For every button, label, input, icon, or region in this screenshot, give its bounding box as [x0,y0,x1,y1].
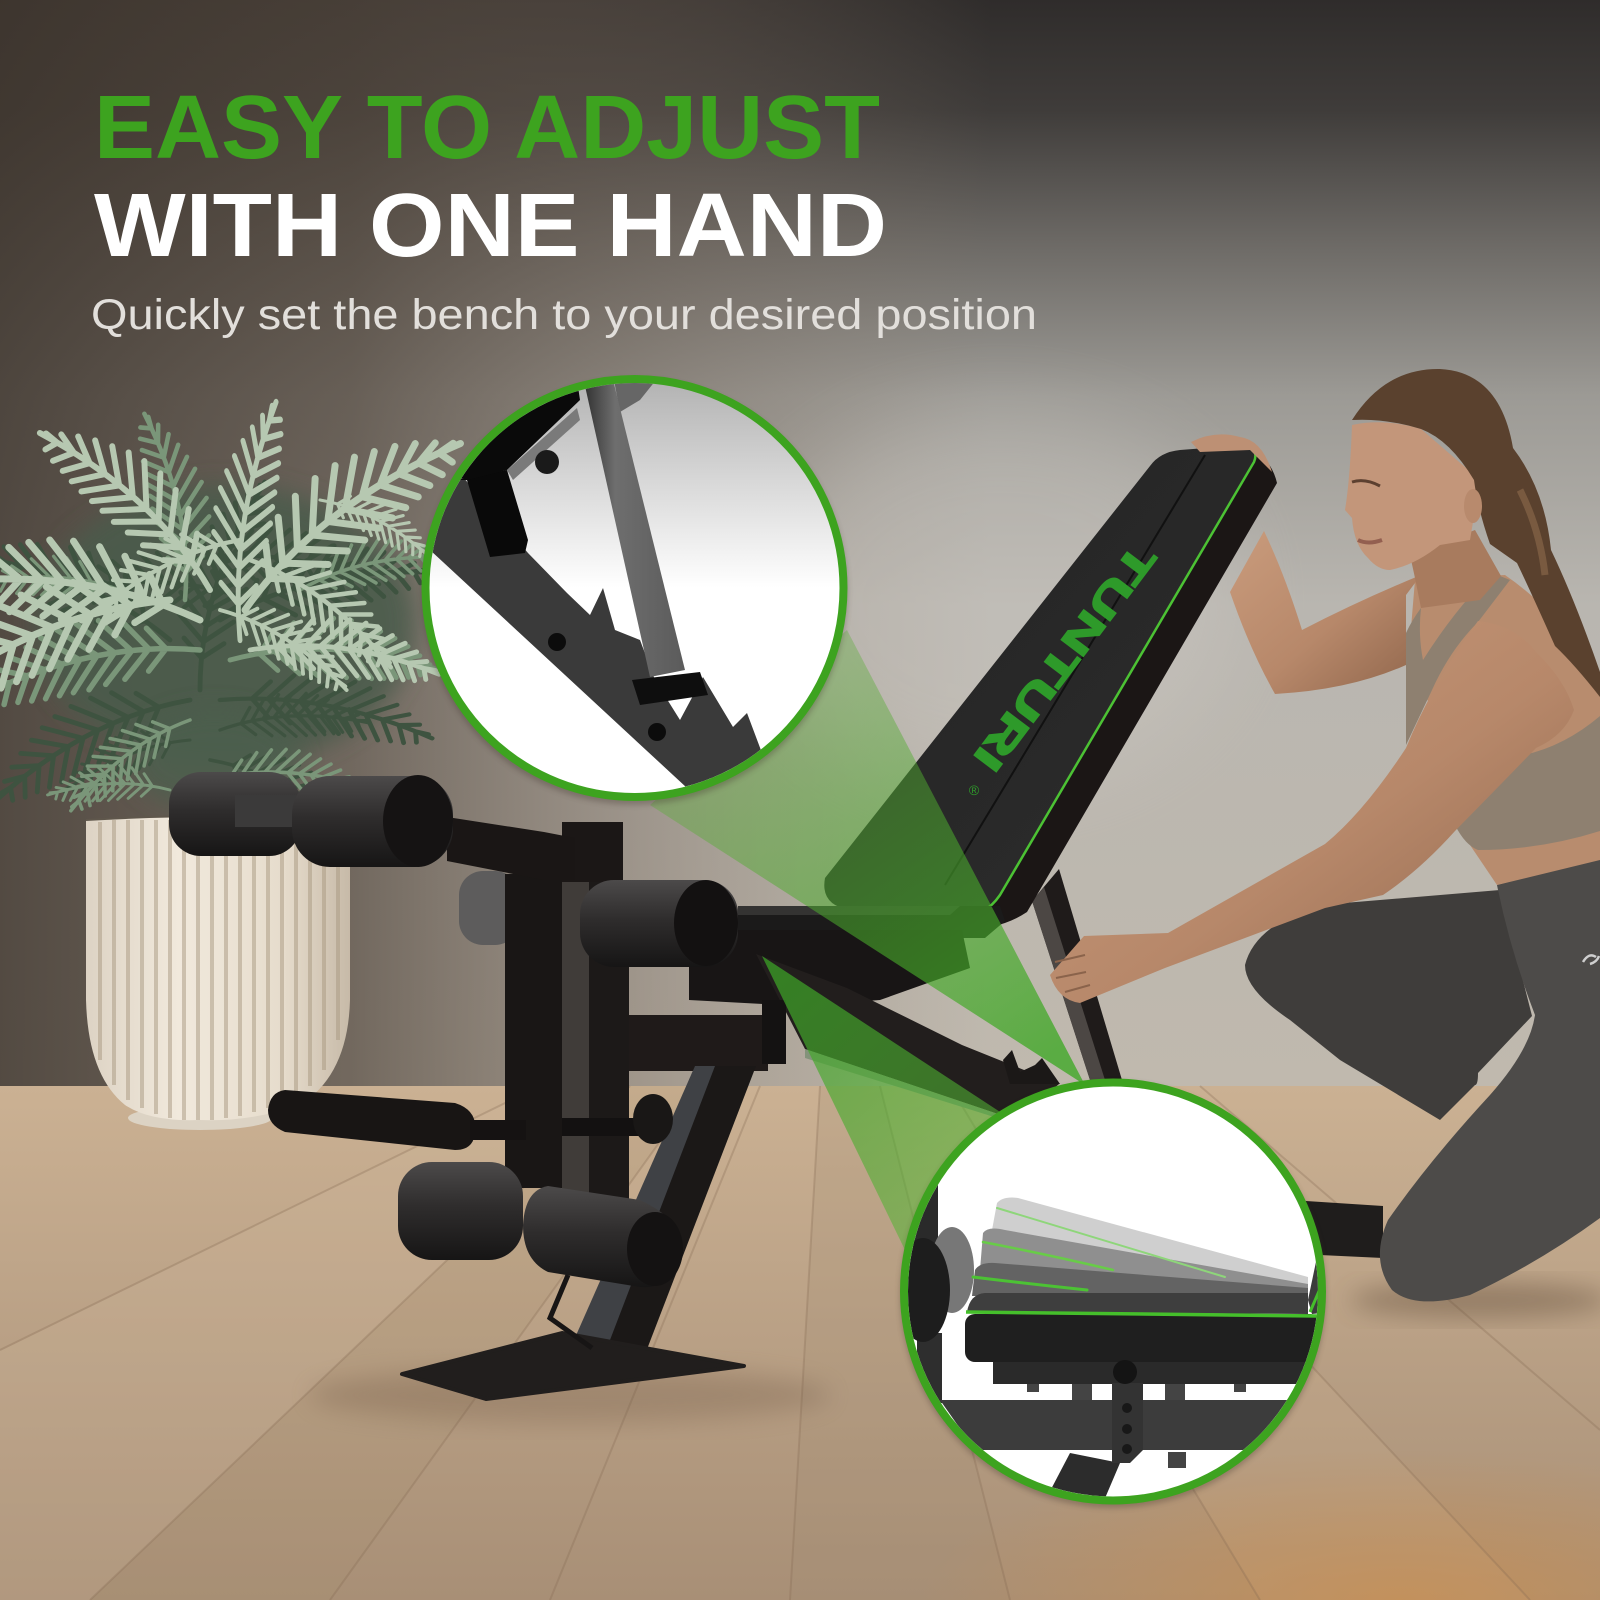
lower roller back [398,1162,523,1260]
hand grip bar [268,1090,526,1150]
bench seat and frame [169,772,1060,1399]
pin assembly [632,672,708,705]
fingers [1055,955,1090,992]
seat pad [965,1314,1320,1362]
post lower [917,1333,942,1403]
rail bolts [548,633,666,741]
post upper [913,1183,938,1247]
woman kneeling [1050,369,1600,1301]
seat [736,906,1005,938]
top-left black bar [462,391,580,478]
grey strut [585,380,685,677]
height-adjust bracket [762,1000,786,1064]
leggings logo mark [1583,955,1599,964]
face [1345,422,1480,570]
ghost pad 2 [980,1228,1308,1288]
lower arm reaching to post [1050,621,1574,1003]
adjust ball [1113,1360,1137,1384]
plant pot [86,816,350,1130]
bench support post [1032,869,1122,1080]
top bracket [562,822,623,882]
hook handle [550,1275,592,1348]
torso [1410,575,1600,885]
under-seat plate [993,1362,1307,1384]
title line 2: WITH ONE HAND [94,176,887,276]
back leg in grey leggings [1245,890,1532,1120]
subtitle: Quickly set the bench to your desired position [91,291,1037,339]
under-seat frame [689,930,970,1006]
callout circle: seat tilt detail [896,1082,1330,1510]
facial features [1352,481,1382,542]
ghost pad 3 [972,1263,1308,1296]
title [94,78,887,276]
front leg and hips in grey leggings [1380,858,1600,1301]
green highlight beam: incline rail to top callout [650,630,1085,1085]
raised arm [1230,531,1421,694]
middle roller back [459,871,519,945]
knob [535,450,559,474]
horizontal tube [629,1015,768,1071]
brand logo: TUNTURI [965,536,1164,779]
rail notches [1003,1050,1060,1084]
background: wooden floor [0,1086,1600,1600]
fingers over top of backrest [1191,434,1272,472]
plant foliage [0,382,464,837]
black bracket [457,470,528,557]
inner column [562,880,589,1200]
background: wall [0,0,1600,1100]
hair and ponytail [1352,369,1600,697]
registered mark: ® [969,782,980,798]
rear diagonal rail [756,954,1059,1114]
neck [1410,530,1501,608]
roller [934,1227,974,1313]
bolts [1027,1384,1246,1468]
top roller pair [169,772,453,867]
notched rail [432,476,761,786]
backrest pad [824,445,1256,917]
backrest edge [1308,1262,1318,1314]
backrest green piping [850,446,1255,917]
backrest side [930,452,1277,930]
rear bench foot [1306,1201,1383,1258]
main column right [589,880,629,1200]
backrest crease [945,455,1205,885]
upper arm [447,817,575,880]
seat green piping [966,1312,1318,1316]
grey arm [507,408,580,480]
diagonal front leg [574,1066,756,1357]
lower roller front [523,1186,683,1287]
ghost pad 1 [992,1198,1308,1284]
main beam [940,1400,1290,1450]
tank top [1406,576,1600,850]
adjustment knob [562,1094,673,1144]
angled leg [1052,1453,1120,1496]
seat top [967,1293,1308,1314]
pad underside [614,383,653,412]
title line 1: EASY TO ADJUST [94,78,880,178]
green highlight beam: seat callout [762,956,1020,1250]
bench backrest [824,434,1277,930]
ear [1464,489,1482,523]
ghost green lines [973,1208,1225,1290]
adjust plate with holes [1112,1383,1143,1463]
main column left [505,874,562,1188]
foot plate [402,1333,744,1399]
middle roller front [580,880,738,967]
callout circle: incline rail detail [420,375,848,805]
potted plant [0,382,464,1130]
